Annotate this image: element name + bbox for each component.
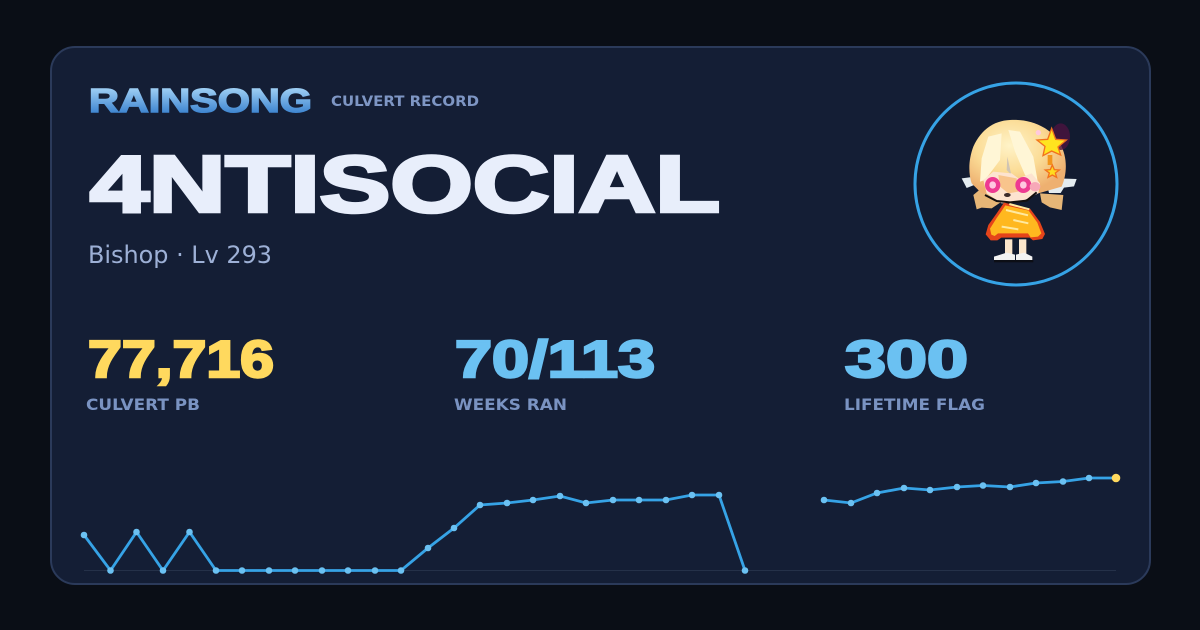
stat: lifetime flag [844, 331, 985, 414]
avatar ring [915, 83, 1117, 285]
stat value: 77,716 [88, 331, 274, 389]
chart line: second segment [824, 478, 1116, 503]
line chart: weekly culvert scores [81, 474, 1120, 574]
chart points [81, 475, 1092, 574]
panel: record card [51, 47, 1150, 584]
chart line: first segment [84, 495, 745, 570]
avatar sprite [962, 120, 1077, 262]
stat value: 70/113 [455, 331, 655, 389]
chart latest point highlight [1112, 474, 1120, 482]
stat: culvert PB [86, 331, 274, 414]
stat label: WEEKS RAN [454, 395, 567, 414]
stat: weeks ran [454, 331, 655, 414]
header: brand logo: RAINSONG [89, 82, 312, 119]
header: subtitle: CULVERT RECORD [331, 94, 479, 110]
stat value: 300 [845, 331, 968, 389]
title: character name: 4NTISOCIAL [90, 140, 720, 228]
icon: character avatar [915, 83, 1117, 285]
stat label: LIFETIME FLAG [844, 395, 985, 414]
stat label: CULVERT PB [86, 395, 200, 414]
text: class and level: Bishop · Lv 293 [88, 241, 272, 269]
